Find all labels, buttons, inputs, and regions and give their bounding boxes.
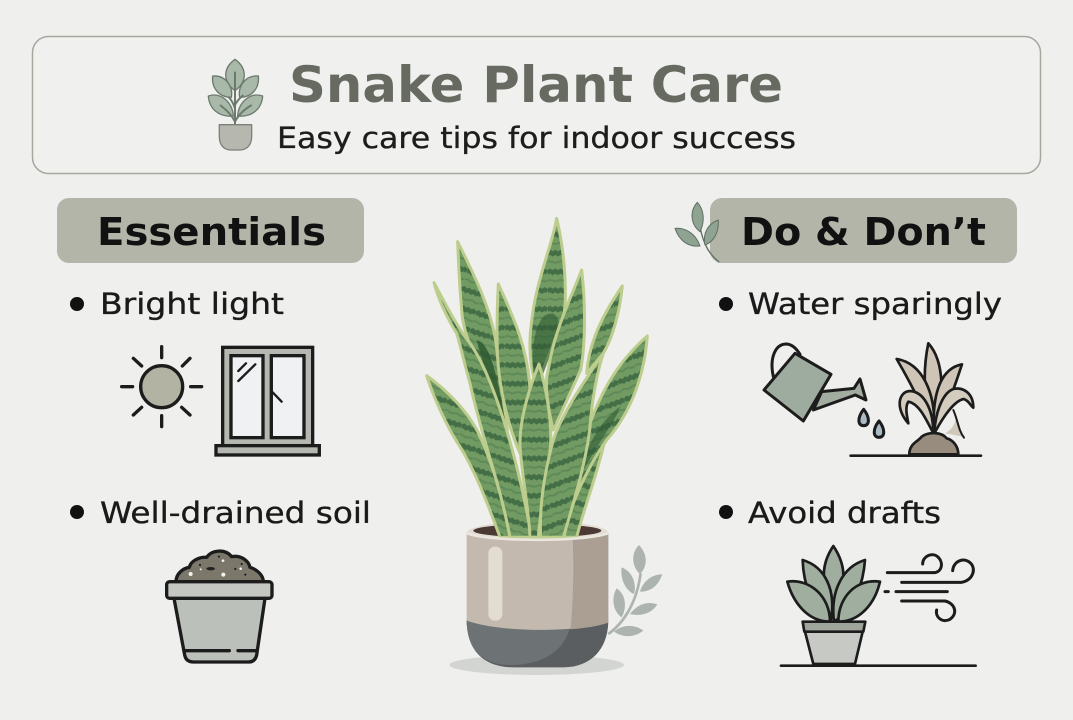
icon: badge leaf sprig	[675, 202, 719, 262]
heading: Do & Don't badge	[710, 198, 1017, 263]
heading: title: Snake Plant Care	[289, 56, 783, 114]
panel: title box	[32, 36, 1040, 174]
icon: wind lines	[885, 555, 973, 621]
panel: do and don't	[675, 198, 1017, 666]
text: soil bullet: Well-drained soil	[100, 496, 371, 530]
pot soil	[467, 521, 608, 540]
icon: header potted plant	[208, 59, 263, 150]
illustration: snake plant	[427, 218, 662, 675]
icon: plant in draft	[781, 546, 976, 666]
icon: dried plant	[851, 343, 981, 456]
leaves	[427, 218, 647, 537]
text: drafts bullet: Avoid drafts	[748, 496, 941, 530]
sprig behind pot	[608, 545, 662, 636]
pot	[449, 532, 624, 675]
panel: essentials	[57, 198, 371, 662]
text: subtitle: Easy care tips for indoor success	[277, 121, 796, 155]
text: bright light bullet: Bright light	[100, 287, 284, 321]
icon: window	[216, 347, 319, 455]
heading: Essentials badge: Essentials	[97, 210, 326, 254]
heading: Essentials badge	[57, 198, 364, 263]
icon: watering can	[764, 344, 884, 437]
text: water bullet: Water sparingly	[748, 287, 1002, 321]
icon: sun	[122, 347, 202, 427]
heading: Do & Don't badge: Do & Don’t	[741, 210, 986, 254]
icon: soil pot	[167, 551, 272, 662]
